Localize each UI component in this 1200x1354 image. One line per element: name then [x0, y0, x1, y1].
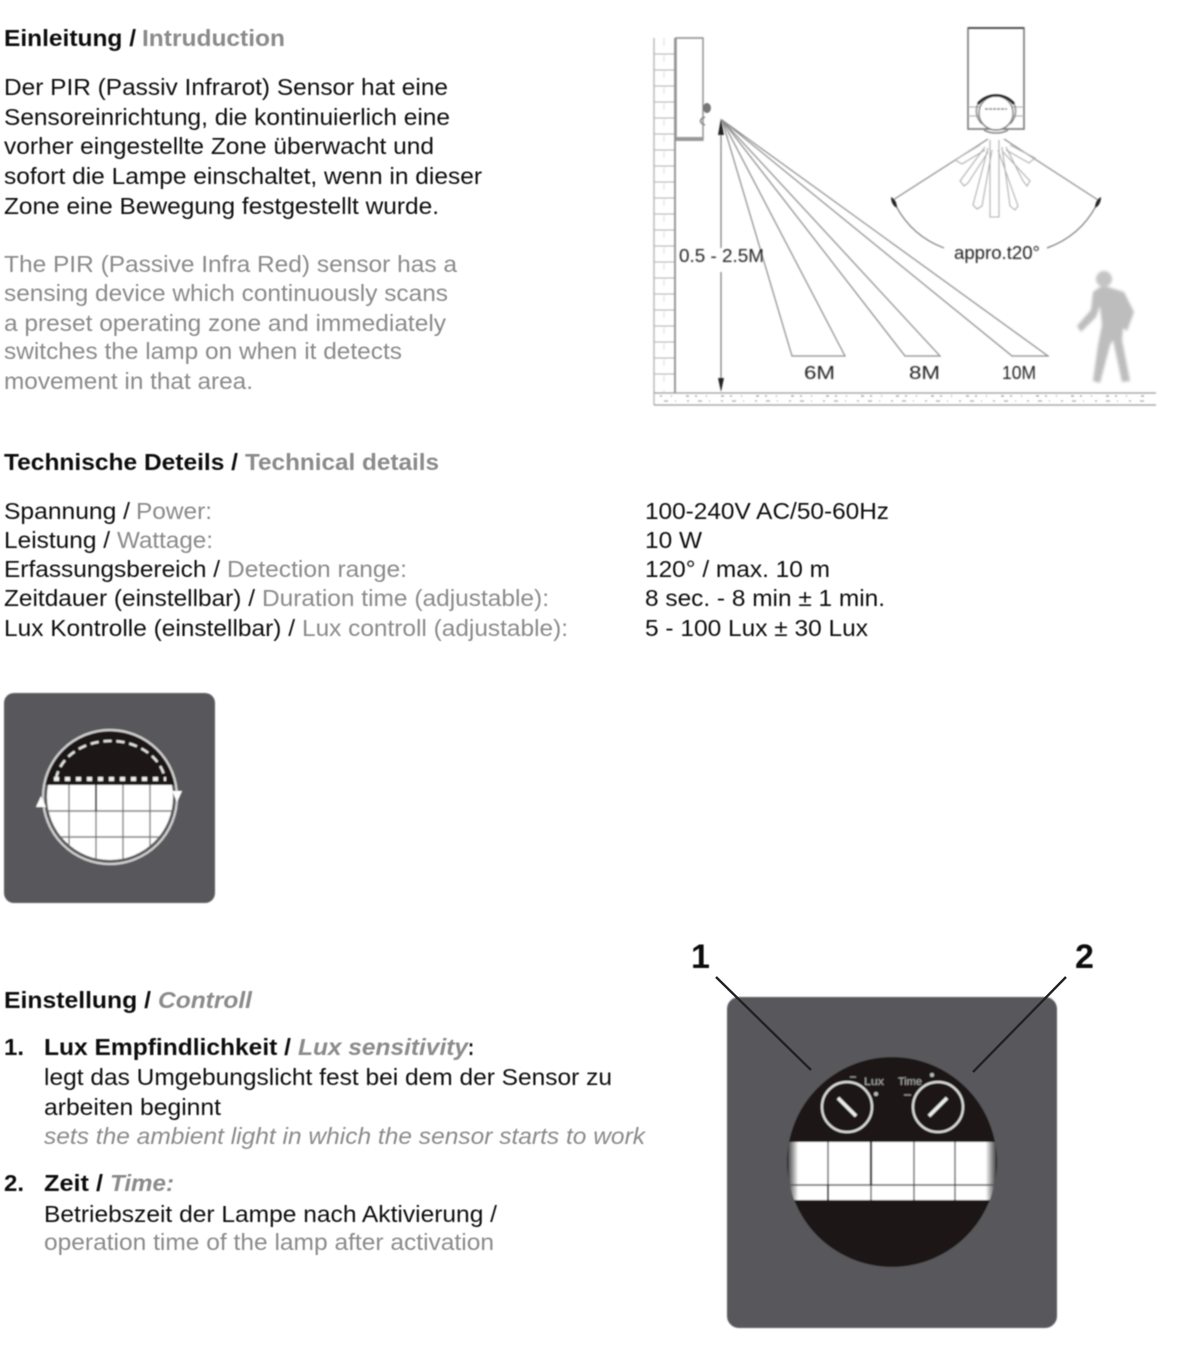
- panel: sensor control diagram: [727, 997, 1057, 1328]
- section: technical details: [4, 449, 889, 641]
- item 2: Time: operation time of the lamp after activation: [44, 1229, 494, 1255]
- item 2: Time: Betriebszeit der Lampe nach Aktivierung /: [44, 1201, 497, 1227]
- heading: Einleitung / Introduction: [4, 25, 285, 51]
- section: control instructions: [4, 987, 646, 1255]
- spec values: [645, 498, 889, 641]
- top view fan rays: [893, 139, 1098, 217]
- heading: Technical details: [4, 449, 439, 475]
- spec values: 120° / max. 10 m: [645, 556, 830, 582]
- text block: German introduction: Der PIR (Passiv Infrarot) Sensor hat eine: [4, 74, 448, 100]
- item 1: Lux sensitivity: 1.: [4, 1034, 24, 1060]
- item 2: Time: Zeit /: [44, 1170, 103, 1196]
- text block: English introduction: sensing device which continuously scans: [4, 280, 448, 306]
- spec labels: Power:: [136, 498, 212, 524]
- item 1: Lux sensitivity: :: [468, 1034, 474, 1060]
- text block: German introduction: vorher eingestellte Zone überwacht und: [4, 133, 434, 159]
- label: height: 0.5 - 2.5M: [679, 246, 764, 266]
- text block: English introduction: The PIR (Passive Infra Red) sensor has a: [4, 251, 458, 277]
- text block: English introduction: movement in that area.: [4, 368, 253, 394]
- label: 8M: 8M: [909, 363, 940, 383]
- item 1: Lux sensitivity: legt das Umgebungslicht fest bei dem der Sensor zu: [44, 1064, 612, 1090]
- text block: German introduction: Sensoreinrichtung, die kontinuierlich eine: [4, 104, 450, 130]
- item 1: Lux sensitivity: sets the ambient light in which the sensor starts to work: [44, 1123, 646, 1149]
- wall with bricks: [654, 38, 675, 405]
- spec labels: [4, 498, 568, 641]
- sensor window band: [788, 1142, 996, 1200]
- dial: Time: [898, 1073, 963, 1132]
- 120 degree arc: [891, 197, 1101, 248]
- spec values: 10 W: [645, 527, 703, 553]
- item 1: Lux sensitivity: Lux sensitivity: [298, 1034, 470, 1060]
- detection beams 6M, 8M, 10M: [722, 120, 1048, 356]
- spec labels: Leistung /: [4, 527, 110, 553]
- height arrow: [718, 118, 724, 392]
- label: approx 120 degrees: appro.t20°: [954, 243, 1040, 263]
- heading: Technical details: Technical details: [245, 449, 439, 475]
- callout 1: 1: [691, 938, 710, 976]
- dial: Lux: Lux: [864, 1076, 885, 1088]
- text block: German introduction: [4, 74, 482, 219]
- item 1: Lux sensitivity: arbeiten beginnt: [44, 1094, 221, 1120]
- label: 6M: 6M: [804, 363, 835, 383]
- item 2: Time: 2.: [4, 1170, 24, 1196]
- callout 1: [691, 938, 811, 1070]
- floor: [654, 393, 1156, 405]
- spec labels: Detection range:: [227, 556, 407, 582]
- label: 10M: 10M: [1002, 363, 1036, 383]
- spec values: 8 sec. - 8 min ± 1 min.: [645, 585, 885, 611]
- spec labels: Spannung /: [4, 498, 130, 524]
- icon: walking person: [1077, 271, 1134, 383]
- heading: Einleitung / Introduction: Einleitung /: [4, 25, 136, 51]
- text block: English introduction: [4, 251, 458, 394]
- spec labels: Lux Kontrolle (einstellbar) /: [4, 615, 295, 641]
- spec labels: Wattage:: [117, 527, 213, 553]
- callout 2: [973, 938, 1094, 1072]
- spec labels: Lux controll (adjustable):: [302, 615, 568, 641]
- diagram: detection range side and top view: [654, 28, 1156, 405]
- text block: English introduction: a preset operating zone and immediately: [4, 310, 446, 336]
- spec values: 100-240V AC/50-60Hz: [645, 498, 889, 524]
- dial: Lux: [822, 1076, 885, 1132]
- text block: English introduction: switches the lamp on when it detects: [4, 338, 402, 364]
- spec labels: Zeitdauer (einstellbar) /: [4, 585, 255, 611]
- text block: German introduction: Zone eine Bewegung festgestellt wurde.: [4, 193, 439, 219]
- spec values: 5 - 100 Lux ± 30 Lux: [645, 615, 868, 641]
- spec labels: Erfassungsbereich /: [4, 556, 220, 582]
- item 2: Time: Time:: [110, 1170, 174, 1196]
- section: introduction: [4, 25, 482, 394]
- heading: Controll: Controll: [158, 987, 252, 1013]
- lamp side view: [676, 38, 711, 140]
- lamp top view: [968, 28, 1024, 133]
- dial: Time: Time: [898, 1076, 922, 1088]
- heading: Controll: [4, 987, 252, 1013]
- heading: Einleitung / Introduction: Intruduction: [142, 25, 285, 51]
- item 2: Time: [4, 1170, 497, 1255]
- text block: German introduction: sofort die Lampe einschaltet, wenn in dieser: [4, 163, 482, 189]
- heading: Technical details: Technische Deteils /: [4, 449, 238, 475]
- heading: Controll: Einstellung /: [4, 987, 151, 1013]
- spec labels: Duration time (adjustable):: [262, 585, 549, 611]
- callout 2: 2: [1075, 938, 1094, 976]
- item 1: Lux sensitivity: Lux Empfindlichkeit /: [44, 1034, 291, 1060]
- item 1: Lux sensitivity: [4, 1034, 646, 1149]
- panel: sensor front view: [4, 693, 215, 903]
